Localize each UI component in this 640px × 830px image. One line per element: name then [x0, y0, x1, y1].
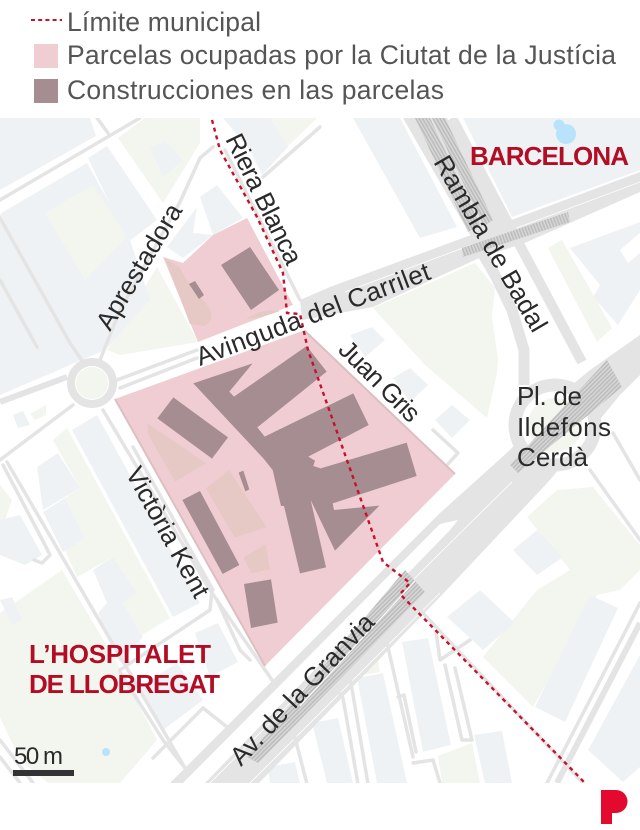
city label: L'Hospitalet de Llobregat: L’HOSPITALET: [29, 639, 211, 669]
label: Rambla de Badal: Rambla de Badal: [428, 150, 554, 337]
city label: L'Hospitalet de Llobregat: DE LLOBREGAT: [29, 669, 220, 699]
city label: L'Hospitalet de Llobregat: [29, 639, 220, 699]
scale bar: 50 m: [14, 743, 63, 770]
label: Victòria Kent: Victòria Kent: [120, 461, 217, 603]
label: Juan Gris: Juan Gris: [333, 334, 427, 428]
roundabout: [71, 362, 113, 404]
main building complex: [193, 346, 417, 573]
label: Pl. de Ildefons Cerdà: Pl. de: [517, 381, 582, 411]
building: upper small: [189, 281, 204, 299]
building: south block: [244, 579, 278, 628]
label: Pl. de Ildefons Cerdà: Cerdà: [517, 442, 589, 472]
label: Riera Blanca: Riera Blanca: [220, 128, 309, 270]
label: Pl. de Ildefons Cerdà: [517, 381, 611, 472]
building: upper large: [221, 247, 279, 310]
parcel: upper: [163, 218, 293, 342]
municipal boundary: [212, 120, 585, 783]
logo: [601, 790, 628, 824]
tram tracks hatched: [247, 118, 622, 763]
legend: parcels: Parcelas ocupadas por la Ciutat de la Justícia: [67, 40, 616, 70]
city label: Barcelona: BARCELONA: [470, 141, 629, 171]
building: small: [239, 471, 249, 491]
building: west block: [157, 397, 228, 459]
water: [102, 120, 576, 756]
label: Av. de la Granvia: Av. de la Granvia: [224, 607, 381, 771]
building: south-west block: [182, 491, 239, 574]
label: Pl. de Ildefons Cerdà: Ildefons: [517, 412, 611, 442]
parcel: main: [115, 330, 455, 666]
legend: buildings: Construcciones en las parcelas: [67, 75, 444, 105]
label: Avinguda del Carrilet: Avinguda del Carrilet: [192, 256, 435, 372]
legend: [31, 7, 616, 105]
legend: boundary: Límite municipal: [67, 7, 261, 37]
scale bar: [13, 743, 74, 776]
open spaces: [148, 423, 270, 573]
label: Aprestadora: Aprestadora: [89, 197, 189, 335]
street labels: [89, 128, 611, 771]
